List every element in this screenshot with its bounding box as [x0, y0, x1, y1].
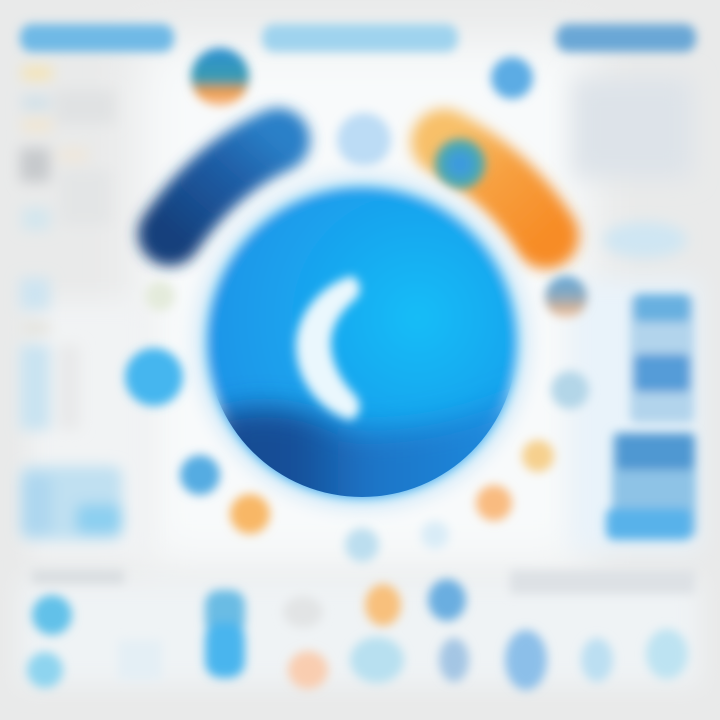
header bar: centre [262, 24, 458, 52]
white crescent icon [296, 276, 360, 420]
panel: right pale label [603, 222, 687, 258]
header bar: left [20, 24, 174, 52]
panel: right stacked bars [630, 294, 694, 423]
icon: top-left multicolour circle [191, 48, 249, 106]
icon: right pale orange circle [522, 440, 554, 472]
panel: bottom blue column [205, 590, 245, 678]
icon: top-centre pale circle [337, 113, 391, 167]
panel: bottom left icons [27, 570, 162, 688]
icon: lower pale blue circle [345, 528, 379, 562]
icon: top-right blue circle [491, 57, 533, 99]
navy lower crescent [217, 380, 512, 497]
main blue circle [203, 183, 521, 501]
icon: pale green circle [145, 281, 175, 311]
panel: upper right text block [572, 78, 692, 178]
icon: left large blue circle [125, 348, 183, 406]
panel: right lower block [606, 432, 696, 540]
icon: right multicolour circle [545, 276, 587, 318]
header bar: right [556, 24, 696, 52]
panel: left text column [20, 67, 115, 430]
icon: right pale blue circle [551, 371, 589, 409]
panel: left lower blue block [20, 466, 122, 540]
icon: lower-left orange circle [230, 494, 270, 534]
icon: lower-left blue circle [180, 455, 220, 495]
navy curved band [170, 140, 278, 234]
icon: lower-right orange circle [476, 485, 512, 521]
icon: circle on orange band [435, 139, 485, 189]
main circle halo [190, 170, 534, 514]
orange curved band [444, 142, 546, 236]
icon: lower faint circle [421, 521, 449, 549]
panel: bottom centre icons [283, 579, 469, 689]
panel: bottom right icons [505, 570, 695, 690]
